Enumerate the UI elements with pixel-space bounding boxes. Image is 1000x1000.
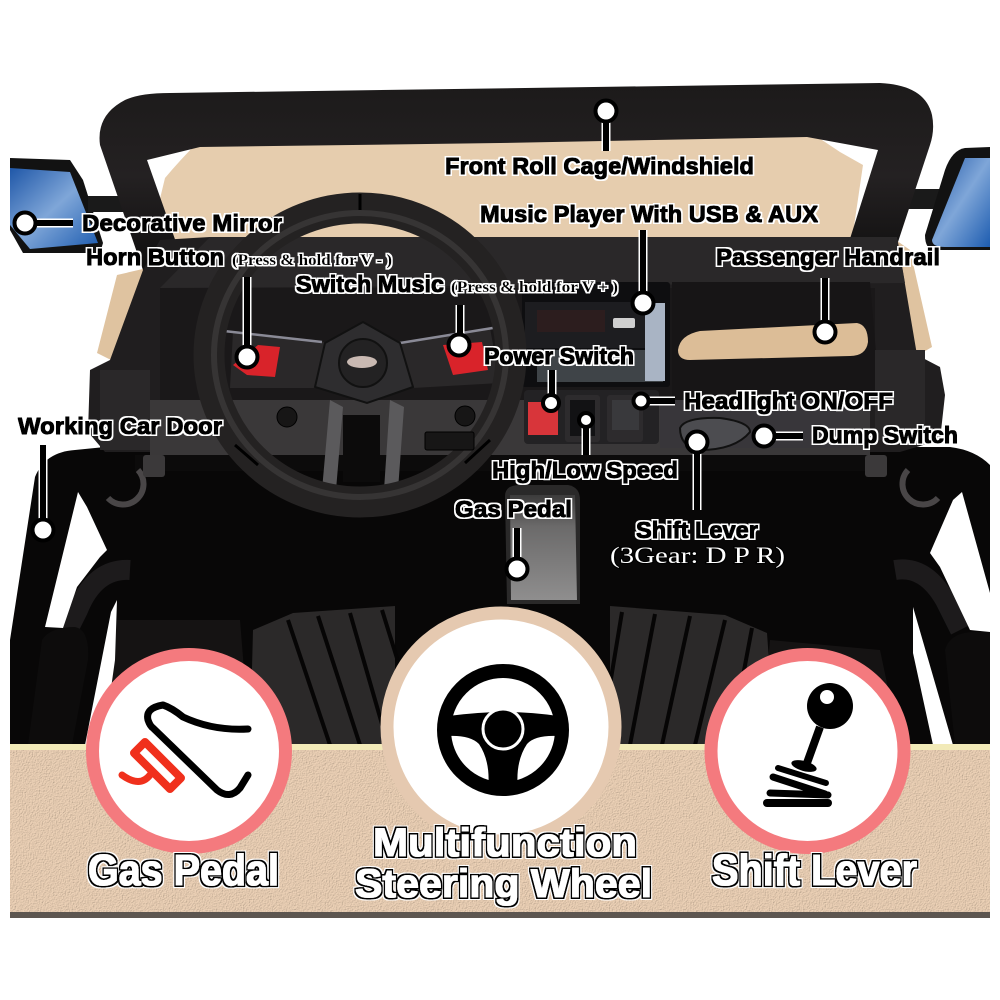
caption: multifunction: Multifunction (373, 821, 637, 865)
wheel rim (209, 208, 511, 502)
note: horn button: (Press & hold for V - ) (232, 252, 392, 269)
wheel hub (315, 322, 413, 403)
shift lever housing (680, 418, 750, 450)
steering wheel (209, 194, 511, 502)
panel: vehicle photo illustration (10, 83, 990, 745)
caption: shift lever: Shift Lever (712, 846, 917, 895)
front roll cage (100, 83, 933, 270)
note: shift gears: (3Gear: D P R) (610, 543, 785, 568)
label pointer: dump switch (754, 426, 803, 446)
music player (522, 282, 670, 387)
label: gas pedal: Gas Pedal (455, 496, 572, 522)
label pointer: power switch (543, 370, 559, 411)
label pointer: horn button (236, 277, 258, 368)
white gaps behind door tubes (45, 492, 990, 745)
icon: shift lever circle (711, 654, 904, 848)
red buttons (233, 342, 488, 377)
label: dump switch: Dump Switch (812, 422, 958, 448)
gas pedal (505, 485, 580, 604)
label pointer: passenger handrail (814, 278, 836, 342)
beige side panels (97, 238, 932, 362)
label pointer: shift lever (686, 432, 708, 510)
floor mat (250, 606, 775, 745)
label pointer: roll cage (596, 100, 616, 151)
label: music player: Music Player With USB & AUX (480, 201, 819, 227)
label pointer: working car door (32, 445, 54, 540)
label pointer: music player (632, 230, 654, 314)
label pointer: gas pedal (506, 528, 528, 580)
dashboard (88, 237, 945, 471)
panel: beige feature strip (10, 744, 990, 918)
icon: gas pedal circle (92, 654, 286, 848)
note: switch music: (Press & hold for V + ) (451, 279, 618, 296)
dark base: doors and footwell (10, 447, 990, 745)
passenger handrail (678, 323, 868, 360)
icon: left mirror (10, 158, 133, 253)
switch panel (524, 390, 659, 444)
wheel horizontal spokes (230, 328, 500, 388)
label pointer: high low speed (579, 413, 593, 455)
door joints (108, 455, 938, 505)
dash knobs (277, 406, 475, 450)
label: high low speed: High/Low Speed (492, 457, 678, 483)
label: shift lever: Shift Lever (636, 517, 758, 543)
label pointer: switch music (448, 305, 470, 356)
label: front roll cage: Front Roll Cage/Windshield (445, 153, 754, 179)
icon: steering wheel circle (387, 613, 615, 841)
label: headlight: Headlight ON/OFF (684, 388, 893, 414)
label: decorative mirror: Decorative Mirror (82, 210, 282, 236)
label pointer: decorative mirror (14, 212, 73, 234)
caption: gas pedal: Gas Pedal (88, 846, 279, 895)
label pointer: headlight (634, 394, 675, 408)
icon: right mirror (895, 147, 990, 250)
label: power switch: Power Switch (484, 343, 634, 369)
caption: steering wheel: Steering Wheel (355, 862, 652, 906)
label: horn button: Horn Button (86, 244, 224, 270)
label: switch music: Switch Music (296, 271, 444, 297)
label: passenger handrail: Passenger Handrail (716, 244, 940, 270)
label: working car door: Working Car Door (18, 413, 222, 439)
windshield (150, 130, 863, 240)
wheel lower spokes (322, 400, 404, 490)
